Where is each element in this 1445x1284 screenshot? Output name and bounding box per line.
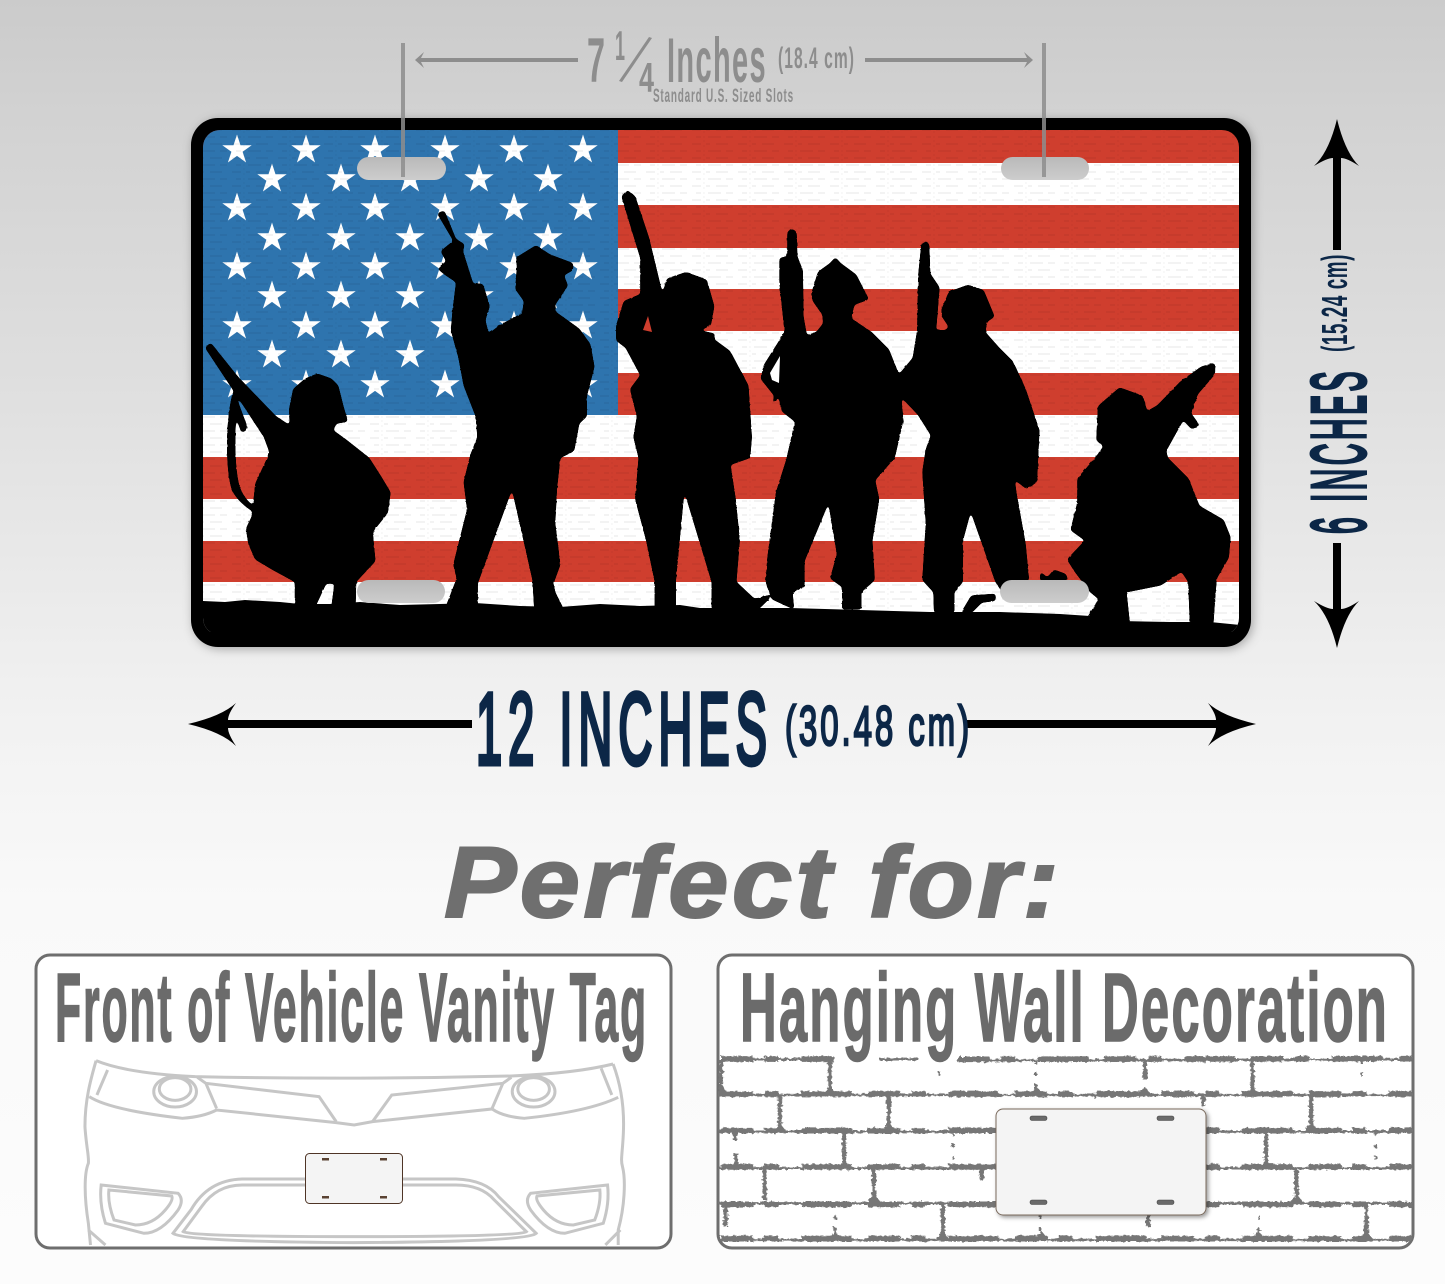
dimension: slot spacing 7 1/4 inches: 1 [615,22,625,69]
arrow down [1314,543,1359,648]
plate black body [191,118,1251,647]
rifle strap gap in soldier 4 [770,356,780,383]
slot spacing number seven: 7 [587,26,605,96]
arrow up [1314,119,1359,250]
thin arrow right [865,52,1033,68]
panel: hanging wall decoration [714,953,1413,1248]
dimension: width 12 inches [188,672,1256,786]
arm gap in soldier 3 [643,316,652,332]
ground silhouette [203,600,1238,632]
panel box [36,955,671,1248]
dimension: width 12 inches: 12 INCHES [476,672,773,786]
standard slots note: Standard U.S. Sized Slots [653,86,794,107]
width centimetres: (30.48 cm) [785,694,972,757]
heading: perfect for: Perfect for: [444,827,1062,939]
soldier 5 boot scrap [961,570,1068,613]
car front outline [85,1061,624,1245]
mini license plate on car [306,1154,402,1204]
centimetres label: (18.4 cm) [778,42,855,75]
arrow right [965,703,1256,746]
soldiers silhouettes left [205,191,774,609]
soldier 2 standing with rifle raised [437,211,594,609]
flag stripes [203,130,1239,632]
soldier 6 kneeling with rifle raised [1067,363,1230,625]
soldier 5 standing with rifle [898,241,1039,613]
blank plate on wall [996,1109,1206,1215]
soldier 4 standing with rifle [761,229,903,609]
brick wall [714,1059,1412,1241]
dimension: slot spacing 7 1/4 inches [401,22,1046,177]
mounting slots [357,157,1089,603]
arrow left [188,703,472,746]
thin arrow left [415,52,578,68]
license plate [191,118,1251,647]
dimension: height 6 inches: 6 INCHES [1297,368,1382,534]
panel box [718,955,1413,1248]
infographic canvas: Front of Vehicle Vanity Tag [55,953,648,1062]
slot guide lines [401,43,1046,177]
panel: front of vehicle vanity tag [36,953,671,1248]
height centimetres: (15.24 cm) [1314,254,1355,352]
soldiers silhouettes right [761,229,1230,625]
fraction denominator: 4 [639,54,654,101]
soldier 3 standing with rifle raised [616,191,774,609]
dimension: slot spacing 7 1/4 inches: Inches [667,26,767,96]
fraction bar [619,37,652,82]
american flag [203,130,1240,640]
soldier 1 kneeling with rifle [205,343,390,609]
blue canton [203,130,618,415]
fifty stars [222,134,598,398]
